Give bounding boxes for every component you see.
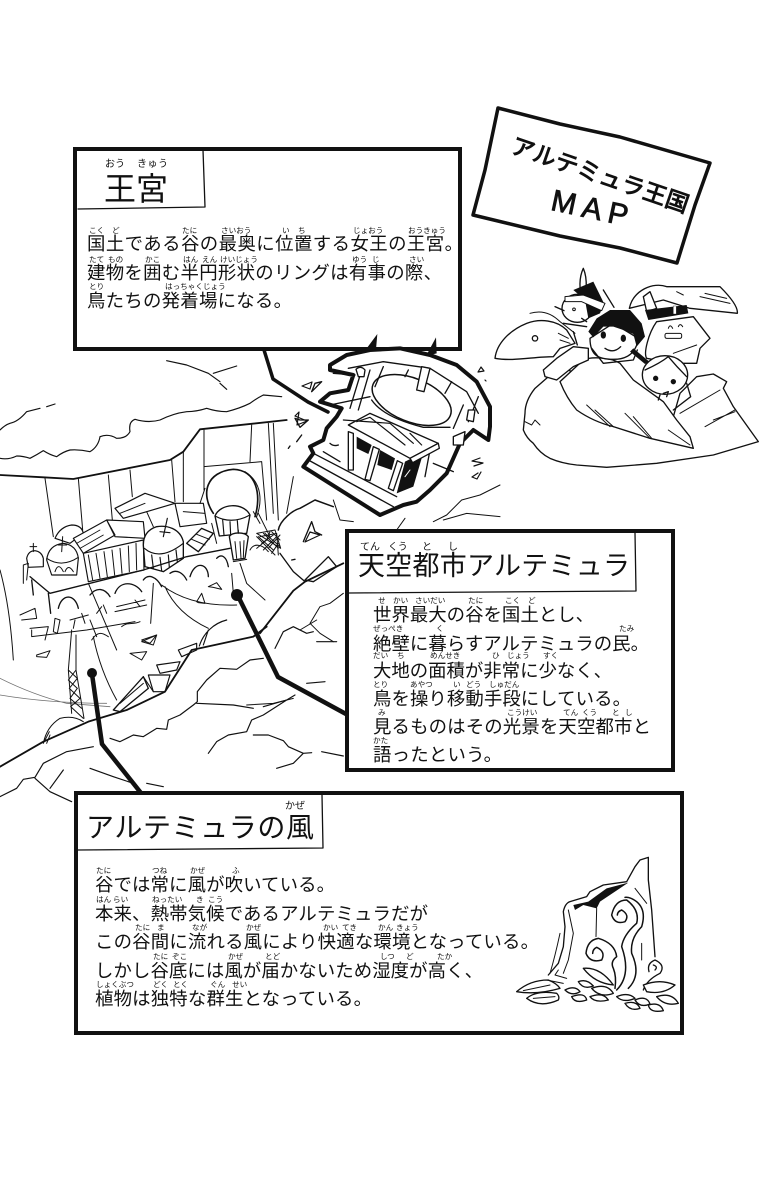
text block: sky city description: 世界最大の谷を国土とし、 — [373, 604, 594, 625]
text block: sky city description: 語ったという。 — [373, 744, 502, 765]
text block: wind description: たに — [96, 866, 111, 875]
text block: royal palace description: さい — [409, 255, 424, 264]
heading: wind — [78, 795, 323, 850]
heading: royal palace: 王宮 — [104, 171, 168, 207]
text block: wind description: しかし谷底には風が届かないため湿度が高く、 — [95, 960, 483, 981]
text block: royal palace description: はっちゃくじょう — [165, 282, 226, 291]
text block: wind description: てき — [342, 923, 357, 932]
text block: sky city description: たに — [468, 596, 483, 605]
text block: royal palace description: じ — [372, 255, 380, 264]
text block: sky city description: 見るものはその光景を天空都市と — [373, 716, 651, 737]
character: boy with black hair — [588, 310, 649, 364]
text block: wind description: せい — [232, 980, 247, 989]
text block: sky city description — [373, 596, 651, 765]
illustration: overgrown rock with spiral plants — [517, 857, 678, 1011]
text block: royal palace description: 国土である谷の最奥に位置する女王の王宮。 — [87, 233, 463, 254]
heading: royal palace: きゅう — [137, 158, 168, 170]
text block: wind description: こう — [208, 895, 223, 904]
text block: wind description: なが — [192, 922, 208, 932]
text block: royal palace description: さいおう — [221, 226, 251, 235]
text block: wind description: かぜ — [190, 866, 206, 875]
character: girl with braid — [642, 356, 691, 410]
text block: wind description: らい — [113, 895, 128, 904]
text block: wind description: しつ — [380, 952, 395, 961]
text block: sky city description: とり — [373, 680, 388, 689]
text block: sky city description: こく — [505, 596, 520, 605]
text block: royal palace description: えん — [202, 255, 218, 264]
text block: wind description: ど — [406, 952, 414, 961]
text block: wind description: 植物は独特な群生となっている。 — [95, 988, 372, 1009]
text block: royal palace description: はん — [183, 255, 199, 264]
character: wing feathers of the bird — [560, 358, 693, 448]
heading: sky city: と — [422, 541, 432, 553]
panel: sky city Artemiura — [347, 531, 673, 770]
text block: royal palace description: けいじょう — [220, 255, 258, 264]
text block: sky city description: こうけい — [507, 708, 537, 717]
map: upper valley, cliffs and clouds — [0, 361, 500, 705]
text block: sky city description: あやつ — [410, 680, 433, 689]
text block: sky city description: 鳥を操り移動手段にしている。 — [373, 688, 631, 709]
text block: royal palace description: ど — [112, 226, 120, 235]
text block: wind description — [95, 866, 539, 1009]
text block: sky city description: く — [436, 624, 444, 633]
heading: sky city: 天空都市アルテミュラ — [358, 551, 630, 581]
heading: sky city: てん — [360, 541, 380, 553]
text block: sky city description: すく — [543, 651, 558, 660]
character: bird body and tail — [523, 367, 758, 467]
character: horned rider with black band — [629, 285, 737, 363]
text block: royal palace description: かこ — [145, 255, 160, 264]
heading: wind: アルテミュラの風 — [86, 812, 314, 843]
text block: royal palace description: たに — [182, 226, 197, 235]
text block: sky city description: かい — [393, 596, 408, 605]
text block: sky city description: し — [625, 708, 633, 717]
map: city buildings on the valley wall — [20, 488, 281, 650]
text block: royal palace description — [87, 226, 463, 311]
callout line: palace to panel — [264, 350, 328, 412]
text block: sky city description: 絶壁に暮らすアルテミュラの民。 — [373, 633, 649, 654]
text block: sky city description: 大地の面積が非常に少なく、 — [373, 660, 612, 681]
heading: royal palace: おう — [105, 158, 125, 170]
text block: wind description: きょう — [396, 923, 419, 932]
text block: wind description: しょくぶつ — [96, 980, 134, 989]
heading: sky city: くう — [388, 541, 408, 553]
panel: wind of Artemiura — [76, 793, 682, 1033]
text block: sky city description: だい — [373, 651, 388, 660]
sign: Artemiura Kingdom MAP: アルテミュラ王国 — [508, 132, 692, 218]
text block: wind description: き — [196, 895, 204, 904]
text block: royal palace description: じょおう — [353, 226, 383, 235]
text block: wind description: ぞこ — [172, 952, 187, 961]
heading: wind: かぜ — [285, 800, 305, 812]
text block: sky city description: と — [612, 708, 620, 717]
heading: sky city: し — [448, 541, 458, 553]
text block: wind description: つね — [152, 866, 168, 875]
text block: royal palace description: 建物を囲む半円形状のリングは有事の際、 — [87, 262, 442, 283]
text block: wind description: ふ — [232, 866, 240, 875]
sign: Artemiura Kingdom MAP — [473, 108, 710, 263]
text block: wind description: ぐん — [210, 980, 226, 989]
text block: sky city description: たみ — [619, 624, 635, 633]
text block: royal palace description: もの — [108, 255, 123, 264]
text block: wind description: とく — [173, 980, 188, 989]
text block: sky city description: ぜっぺき — [373, 624, 403, 633]
text block: sky city description: じょう — [507, 651, 530, 660]
text block: sky city description: かた — [373, 736, 388, 745]
text block: wind description: どく — [153, 980, 168, 989]
text block: wind description: ま — [157, 923, 165, 932]
text block: royal palace description: ゆう — [352, 255, 367, 264]
text block: wind description: ねったい — [152, 895, 182, 904]
text block: royal palace description: こく — [89, 226, 104, 235]
text block: sky city description: さいだい — [415, 596, 445, 605]
heading: sky city — [349, 533, 636, 593]
text block: sky city description: しゅだん — [489, 680, 520, 689]
text block: wind description: かい — [323, 923, 338, 932]
text block: wind description: たに — [153, 952, 168, 961]
panel: royal palace — [75, 149, 463, 349]
text block: sky city description: み — [378, 708, 386, 717]
text block: royal palace description: とり — [89, 282, 104, 291]
text block: wind description: かん — [378, 923, 394, 932]
text block: sky city description: い — [453, 680, 461, 689]
text block: royal palace description: たて — [89, 255, 104, 264]
callout line: city to panel — [231, 589, 346, 714]
text block: wind description: とど — [265, 952, 281, 961]
text block: sky city description: ど — [528, 596, 536, 605]
sign: Artemiura Kingdom MAP: MAP — [548, 184, 631, 233]
text block: sky city description: ち — [397, 651, 405, 660]
text block: wind description: かぜ — [246, 923, 262, 932]
text block: royal palace description: ち — [298, 226, 306, 235]
text block: wind description: はん — [96, 895, 112, 904]
text block: sky city description: くう — [582, 708, 597, 717]
palace surroundings: floating debris — [295, 367, 486, 542]
text block: wind description: 本来、熱帯気候であるアルテミュラだが — [95, 903, 428, 924]
callout line: wind to panel — [87, 668, 141, 793]
illustration: royal palace on the cliff — [303, 334, 490, 515]
text block: wind description: この谷間に流れる風により快適な環境となっている。 — [95, 931, 539, 952]
text block: royal palace description: おうきゅう — [408, 226, 446, 235]
heading: royal palace — [78, 150, 205, 209]
text block: royal palace description: い — [282, 226, 290, 235]
text block: sky city description: めんせき — [430, 651, 460, 660]
illustration: four characters riding a giant bird — [495, 268, 758, 467]
character: rider with turban and feather — [555, 268, 614, 345]
text block: royal palace description: 鳥たちの発着場になる。 — [87, 290, 292, 311]
character: bird head — [495, 321, 575, 359]
text block: wind description: かぜ — [228, 952, 244, 961]
text block: sky city description: ひ — [492, 651, 500, 660]
text block: sky city description: どう — [466, 680, 481, 689]
text block: wind description: たに — [135, 923, 150, 932]
text block: sky city description: てん — [563, 708, 579, 717]
text block: wind description: たか — [437, 952, 453, 961]
text block: wind description: 谷では常に風が吹いている。 — [95, 874, 335, 895]
text block: sky city description: せ — [378, 596, 386, 605]
map: lower mountains, ridge and cloud lines — [0, 620, 343, 802]
